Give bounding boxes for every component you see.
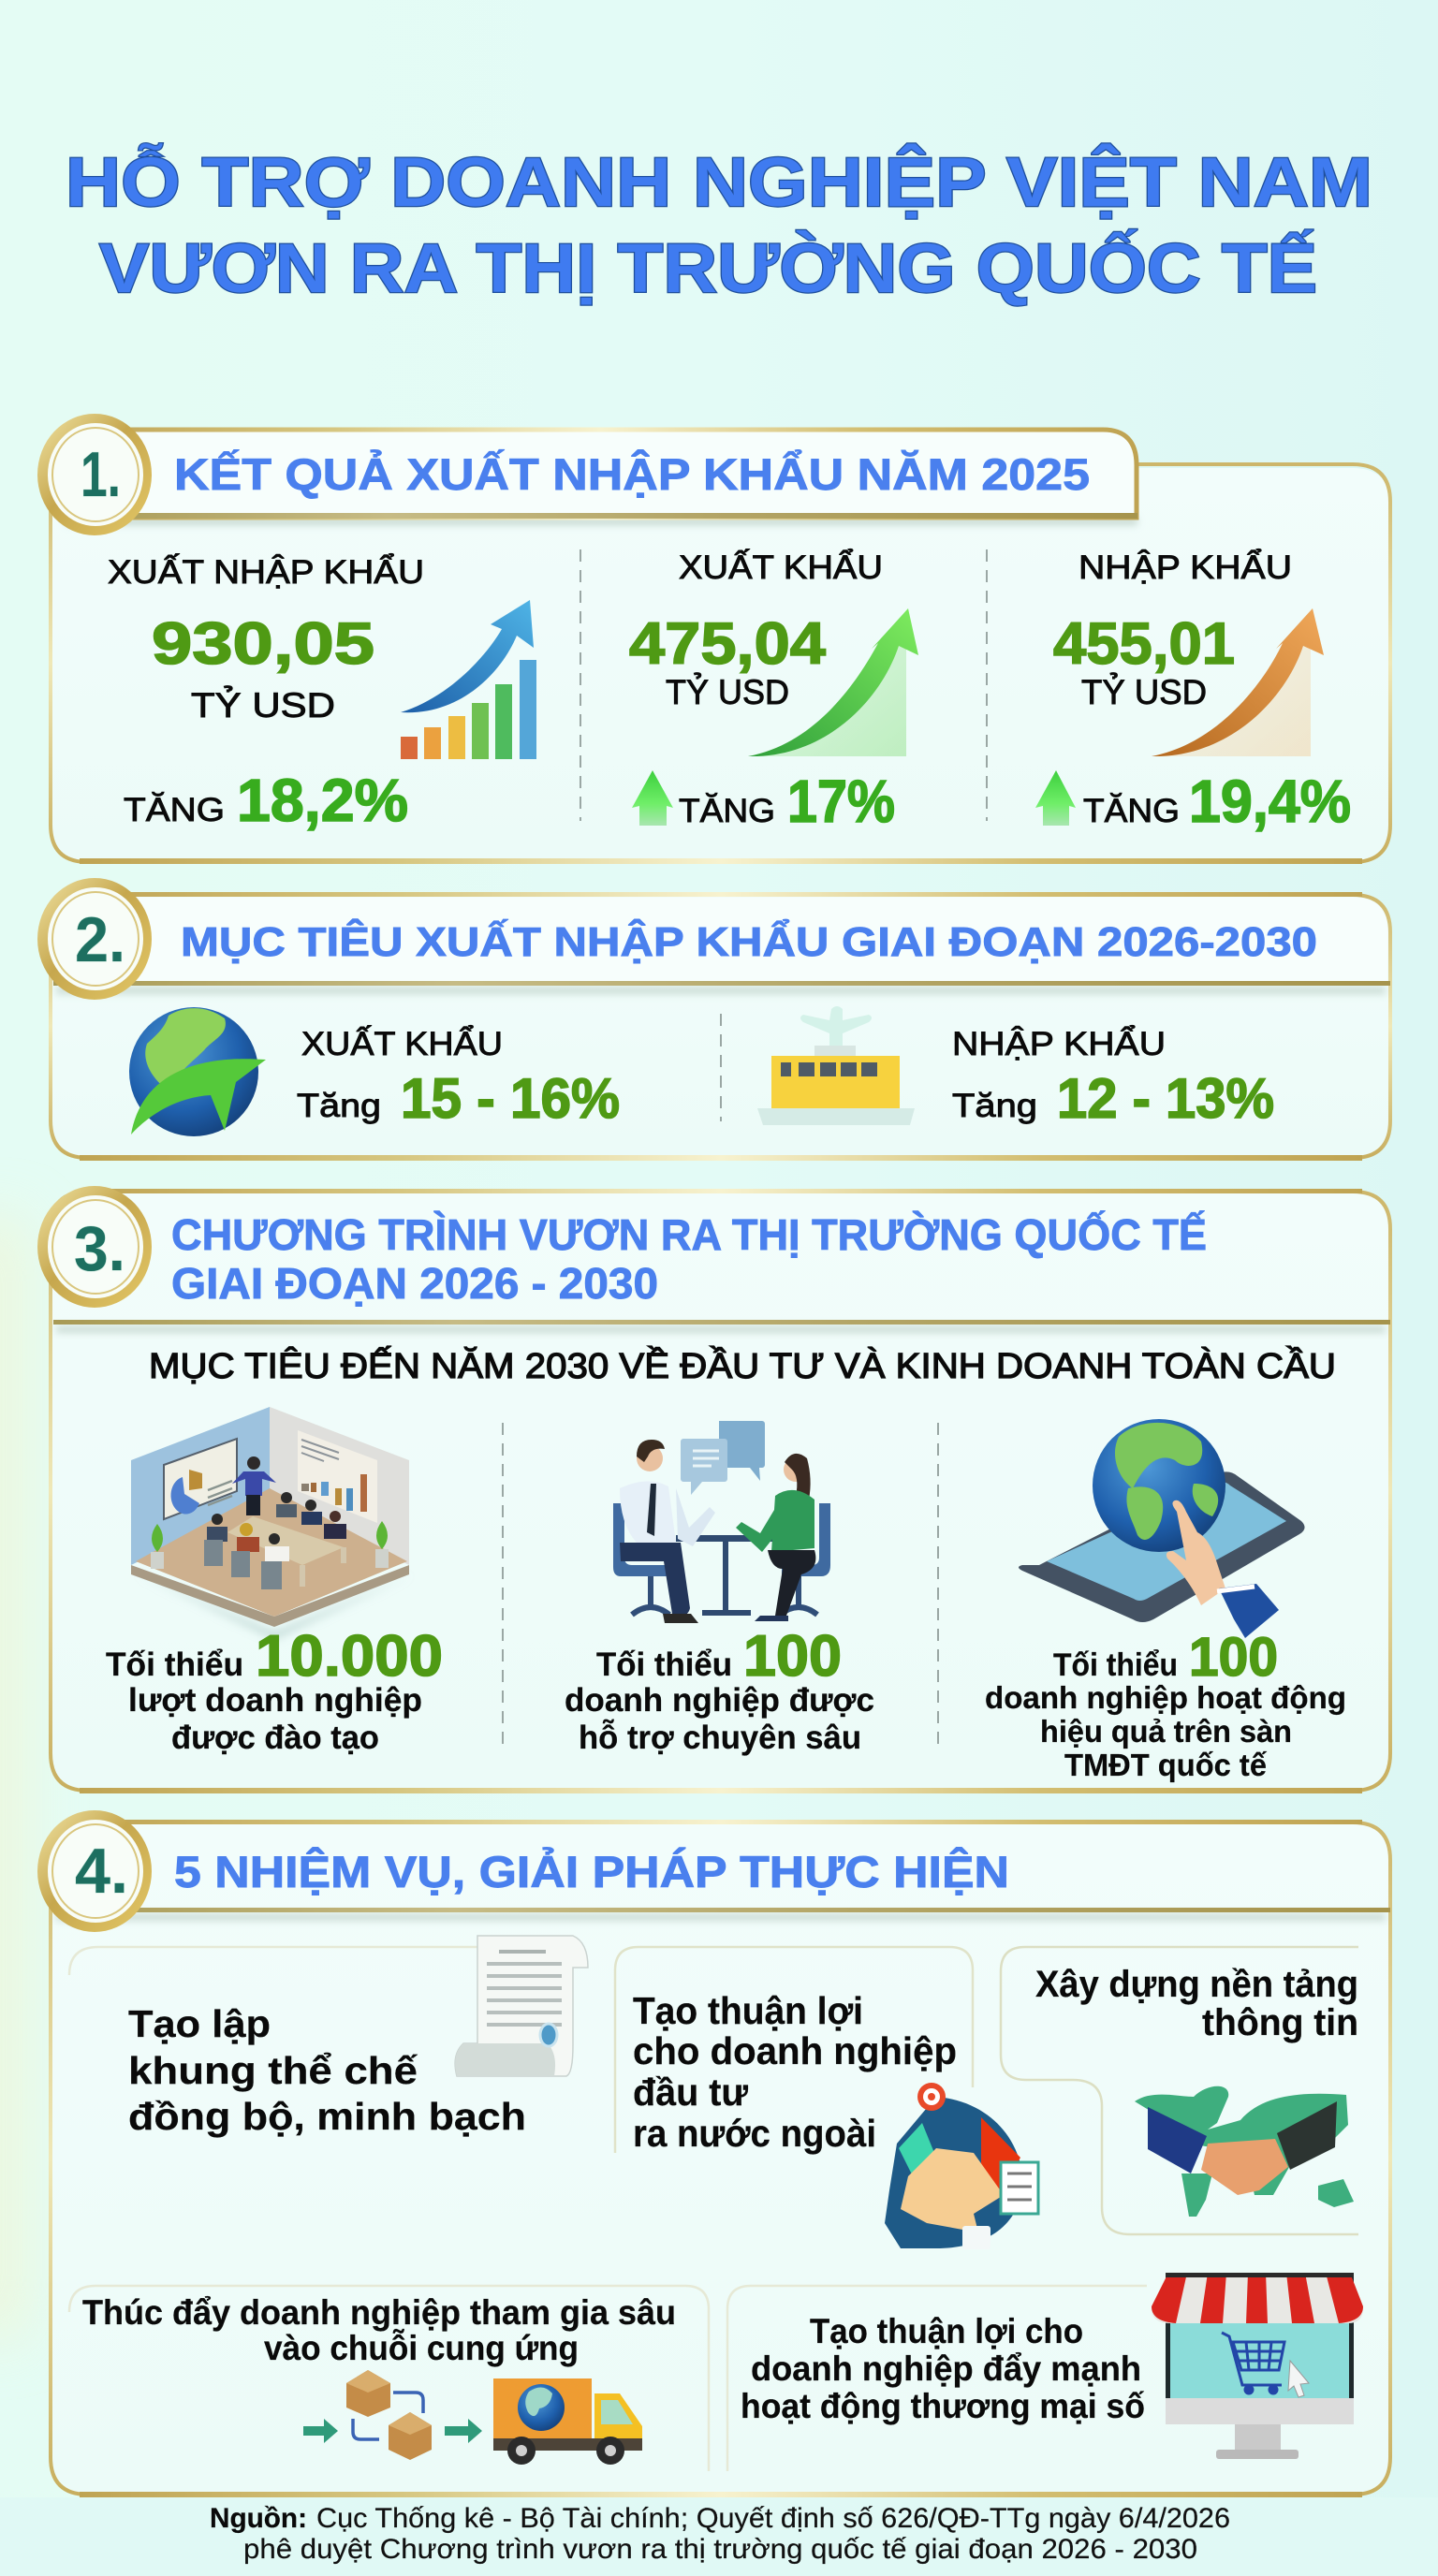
stat: training: lượt doanh nghiệp	[128, 1682, 422, 1719]
export target: 15 - 16%	[401, 1067, 620, 1130]
stat: e-commerce	[985, 1627, 1346, 1782]
column: exports	[629, 549, 918, 835]
stat: deep support: doanh nghiệp được	[565, 1682, 874, 1719]
title: HỖ TRỢ DOANH NGHIỆP VIỆT NAM	[66, 143, 1372, 221]
icon: small up arrow	[1035, 770, 1076, 826]
icon: ship with crane	[757, 1006, 915, 1125]
meeting table	[227, 1516, 344, 1565]
card: supply chain	[69, 2286, 709, 2471]
panel: section 1 results 2025	[37, 414, 1390, 864]
column: exports: 475,04	[629, 611, 826, 677]
seated people	[204, 1492, 346, 1589]
import target	[952, 1025, 1274, 1130]
import target: NHẬP KHẨU	[952, 1025, 1166, 1062]
chairs	[613, 1503, 669, 1576]
stat: deep support: 100	[743, 1624, 842, 1689]
icon: world map with handshake	[1135, 2086, 1354, 2217]
icon: two people meeting	[613, 1421, 830, 1623]
column: total trade: XUẤT NHẬP KHẨU	[108, 553, 424, 591]
table	[676, 1535, 790, 1542]
presenter	[232, 1456, 276, 1515]
column: imports: 455,01	[1053, 611, 1235, 677]
badge 3	[37, 1186, 152, 1308]
section 3 header: CHƯƠNG TRÌNH VƯƠN RA THỊ TRƯỜNG QUỐC TẾ	[171, 1210, 1207, 1259]
import target: 12 - 13%	[1057, 1067, 1274, 1130]
plants	[151, 1521, 389, 1569]
stat: e-commerce: hiệu quả trên sàn	[1040, 1714, 1292, 1749]
column: imports: TĂNG	[1083, 793, 1180, 829]
column: total trade: 930,05	[152, 611, 374, 677]
stat: training	[106, 1624, 443, 1756]
card: institutional framework: khung thể chế	[128, 2049, 418, 2092]
card: institutional framework: đồng bộ, minh bạch	[128, 2095, 526, 2138]
icon: globe on tablet with pointing hand	[1019, 1419, 1305, 1638]
card: overseas investment: ra nước ngoài	[633, 2112, 876, 2155]
column: total trade: TĂNG	[124, 792, 225, 828]
panel: section 4 tasks and solutions	[37, 1810, 1390, 2497]
stat: deep support: hỗ trợ chuyên sâu	[579, 1719, 861, 1756]
stat: training: Tối thiểu	[106, 1647, 243, 1683]
section 2 header: MỤC TIÊU XUẤT NHẬP KHẨU GIAI ĐOẠN 2026-2030	[181, 917, 1317, 965]
panel: section 2 targets	[37, 878, 1390, 1161]
card: information platform	[1001, 1947, 1358, 2234]
badge 3: 3.	[74, 1213, 125, 1284]
card: digital commerce: hoạt động thương mại số	[741, 2387, 1145, 2425]
card: supply chain: vào chuỗi cung ứng	[264, 2329, 579, 2367]
column: total trade: 18,2%	[237, 767, 408, 834]
divider	[937, 1423, 939, 1750]
icon: isometric meeting room	[131, 1407, 412, 1638]
stat: deep support: Tối thiểu	[596, 1647, 732, 1683]
section 4 header	[53, 1847, 1390, 1921]
divider	[580, 549, 581, 821]
stat: e-commerce: 100	[1189, 1627, 1278, 1688]
stat: training: 10.000	[256, 1624, 443, 1689]
card: information platform: thông tin	[1202, 2002, 1358, 2043]
icon: online store monitor	[1152, 2273, 1363, 2459]
woman	[784, 1457, 808, 1482]
panel: section 3 programme	[37, 1186, 1390, 1793]
stat: training: được đào tạo	[171, 1720, 379, 1756]
column: imports	[1035, 549, 1351, 835]
card: overseas investment: đầu tư	[633, 2071, 748, 2114]
icon: small up arrow	[632, 770, 673, 826]
column: imports: TỶ USD	[1081, 673, 1207, 711]
divider	[502, 1423, 504, 1750]
icon: boxes and flow arrows	[303, 2370, 482, 2460]
icon: green growth arrow	[748, 608, 918, 756]
stat: e-commerce: doanh nghiệp hoạt động	[985, 1680, 1346, 1715]
card: overseas investment	[615, 1947, 1038, 2249]
icon: document scroll	[455, 1936, 588, 2076]
column: imports: 19,4%	[1189, 768, 1351, 835]
section 3 header	[53, 1210, 1390, 1333]
badge 4	[37, 1810, 152, 1932]
shopping cart	[1222, 2333, 1284, 2393]
section 3 header: GIAI ĐOẠN 2026 - 2030	[171, 1259, 658, 1308]
export target: XUẤT KHẨU	[301, 1025, 503, 1062]
section 4 header: 5 NHIỆM VỤ, GIẢI PHÁP THỰC HIỆN	[174, 1847, 1009, 1896]
card: overseas investment: cho doanh nghiệp	[633, 2029, 957, 2072]
card: institutional framework	[69, 1936, 588, 2138]
source footer: Cục Thống kê - Bộ Tài chính; Quyết định số 626/QĐ-TTg ngày 6/4/2026	[316, 2503, 1230, 2534]
icon: rising bar chart with arrow	[401, 600, 536, 759]
card: institutional framework: Tạo lập	[128, 2002, 271, 2045]
column: exports: TĂNG	[679, 793, 775, 829]
source footer: Nguồn:	[210, 2503, 307, 2534]
card: supply chain: Thúc đẩy doanh nghiệp tham gia sâu	[82, 2293, 676, 2332]
card: digital commerce	[727, 2273, 1363, 2471]
badge 4: 4.	[75, 1836, 128, 1907]
title	[66, 143, 1372, 307]
stat: e-commerce: Tối thiểu	[1053, 1647, 1178, 1683]
card: digital commerce: doanh nghiệp đẩy mạnh	[751, 2349, 1141, 2388]
divider	[720, 1014, 722, 1121]
stat: e-commerce: TMĐT quốc tế	[1064, 1748, 1268, 1782]
divider	[986, 549, 988, 821]
export target: Tăng	[297, 1088, 381, 1124]
column: exports: TỶ USD	[666, 673, 789, 711]
icon: handshake with target	[885, 2083, 1038, 2249]
badge 1: 1.	[81, 439, 121, 510]
icon: orange growth arrow	[1152, 608, 1324, 756]
source footer	[210, 2503, 1230, 2565]
man	[637, 1445, 663, 1471]
import target: Tăng	[952, 1088, 1037, 1124]
column: exports: XUẤT KHẨU	[679, 549, 883, 586]
card: information platform: Xây dựng nền tảng	[1035, 1964, 1358, 2005]
card: digital commerce: Tạo thuận lợi cho	[810, 2312, 1083, 2350]
section 1 header tab	[66, 430, 1137, 525]
badge 2	[37, 878, 152, 1000]
icon: globe with green arrow	[129, 1007, 266, 1136]
stat: deep support	[565, 1624, 874, 1756]
column: total trade	[108, 553, 536, 834]
card: overseas investment: Tạo thuận lợi	[633, 1989, 863, 2032]
column: imports: NHẬP KHẨU	[1078, 549, 1292, 586]
section 1 header tab: KẾT QUẢ XUẤT NHẬP KHẨU NĂM 2025	[174, 449, 1090, 499]
title: VƯƠN RA THỊ TRƯỜNG QUỐC TẾ	[99, 229, 1317, 307]
badge 2: 2.	[75, 904, 125, 975]
export target	[297, 1025, 620, 1130]
section 2 header	[53, 898, 1390, 994]
badge 1	[37, 414, 152, 535]
column: total trade: TỶ USD	[191, 686, 335, 724]
column: exports: 17%	[787, 768, 895, 835]
icon: delivery truck with globe	[493, 2378, 642, 2465]
subheading: MỤC TIÊU ĐẾN NĂM 2030 VỀ ĐẦU TƯ VÀ KINH DOANH TOÀN CẦU	[149, 1345, 1336, 1386]
source footer: phê duyệt Chương trình vươn ra thị trường quốc tế giai đoạn 2026 - 2030	[243, 2534, 1197, 2565]
